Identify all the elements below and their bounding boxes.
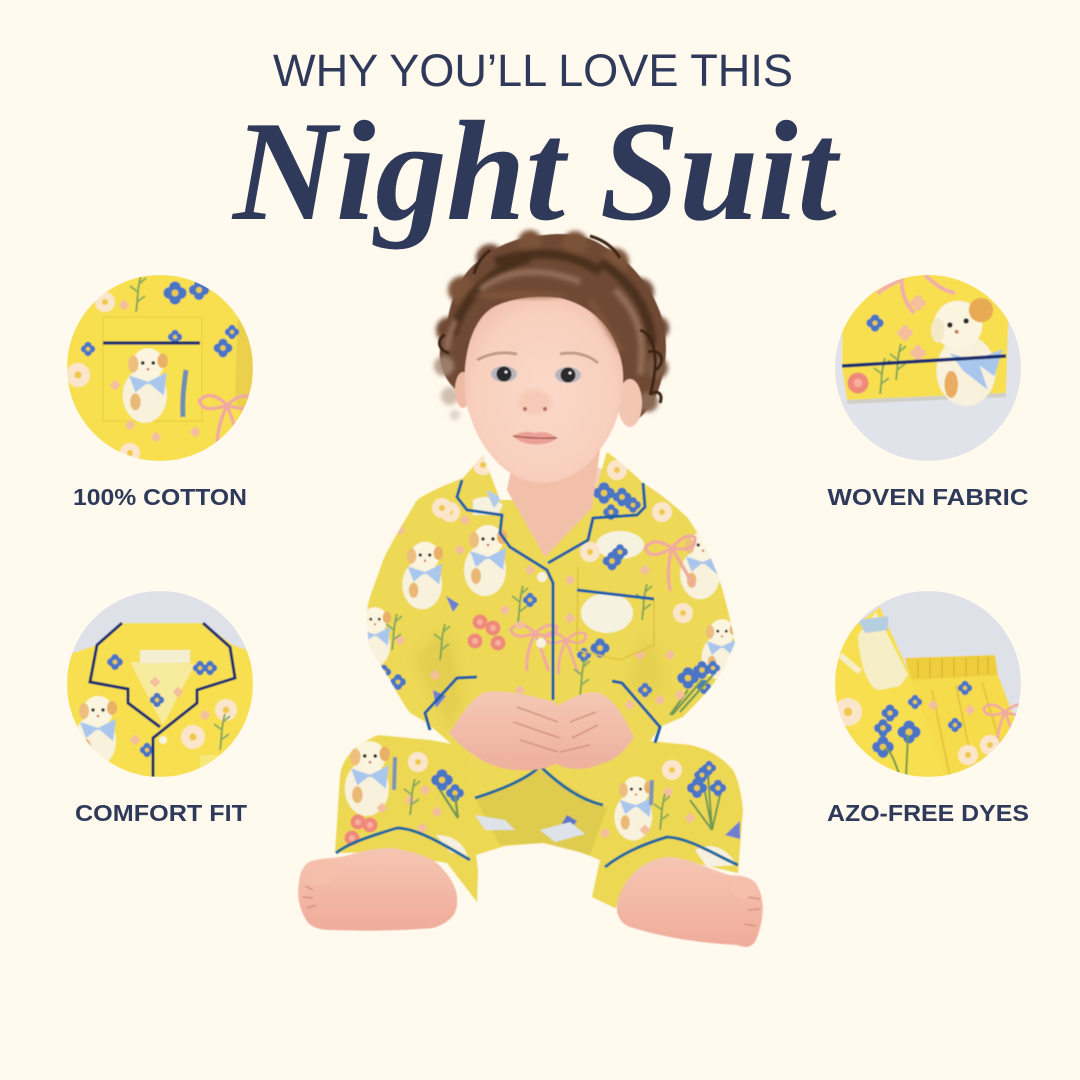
head bbox=[434, 230, 669, 557]
feature: 100% cotton bbox=[66, 275, 253, 510]
shirt bbox=[355, 450, 738, 805]
hair curls bbox=[434, 230, 669, 420]
icon: shirt pocket photo bbox=[66, 275, 253, 463]
feature: azo-free dyes bbox=[827, 591, 1029, 826]
label: 100% cotton: 100% COTTON bbox=[73, 484, 247, 510]
icon: cuff fabric photo bbox=[835, 270, 1021, 461]
neck bbox=[507, 450, 600, 557]
eyes bbox=[491, 366, 517, 382]
feet bbox=[298, 848, 763, 947]
pocket bbox=[577, 567, 654, 660]
feature: woven fabric bbox=[828, 270, 1029, 510]
pants bbox=[335, 735, 743, 908]
shirt hem piping bbox=[475, 768, 538, 798]
shirt piping and collar bbox=[457, 480, 553, 700]
hair back bbox=[440, 234, 666, 422]
mouth bbox=[513, 432, 557, 445]
icon: collar photo bbox=[67, 591, 253, 780]
heading: why you'll love this: WHY YOU’LL LOVE THIS bbox=[273, 45, 793, 96]
nose bbox=[518, 389, 552, 415]
sleeve shading bbox=[421, 640, 458, 716]
title: night suit: Night Suit bbox=[231, 92, 841, 250]
label: azo-free dyes: AZO-FREE DYES bbox=[827, 800, 1029, 826]
baby in yellow night suit bbox=[298, 230, 763, 947]
ears bbox=[455, 372, 471, 408]
label: comfort fit: COMFORT FIT bbox=[75, 800, 248, 826]
label: woven fabric: WOVEN FABRIC bbox=[828, 484, 1029, 510]
feature: comfort fit bbox=[67, 591, 253, 826]
hands bbox=[449, 691, 634, 770]
icon: waistband photo bbox=[834, 591, 1025, 777]
brows bbox=[477, 353, 598, 363]
face bbox=[465, 297, 623, 483]
